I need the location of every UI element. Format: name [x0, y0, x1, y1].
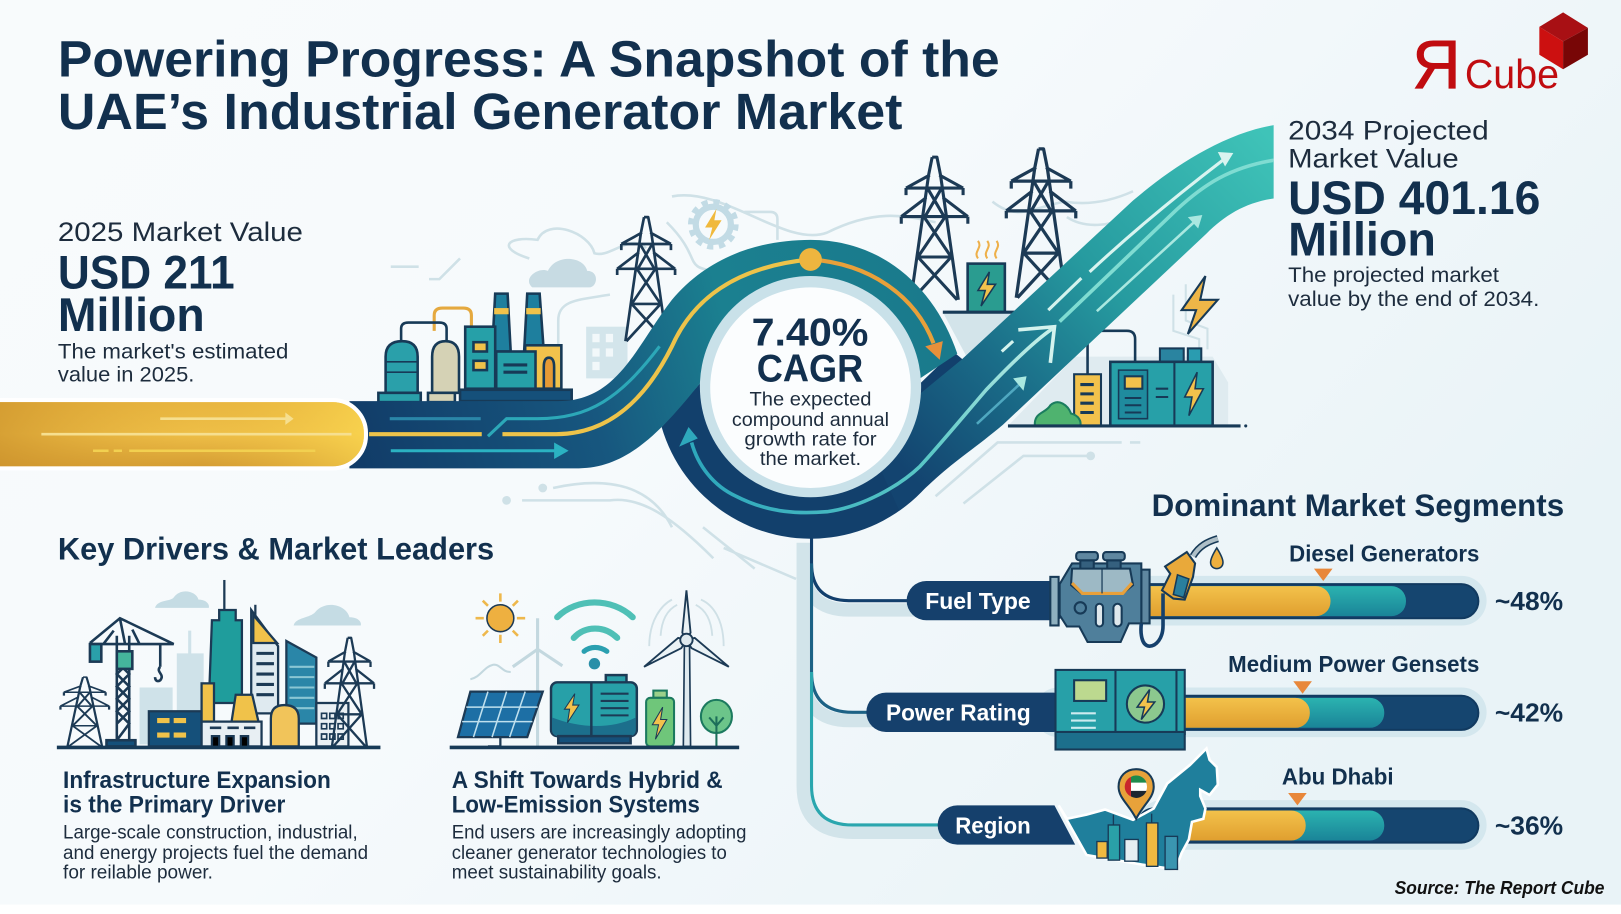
2034 projected value text: value by the end of 2034.	[1288, 286, 1539, 311]
title: Powering Progress: A Snapshot of the	[58, 31, 1000, 88]
growth flow: diagonal band	[879, 125, 1274, 511]
segment: region	[938, 748, 1563, 869]
cloud	[529, 259, 596, 287]
callout: medium power gensets: Medium Power Gensets	[1228, 651, 1479, 677]
icon: location pin with flag	[1119, 769, 1154, 819]
growth flow: S band	[349, 240, 957, 468]
segment: power rating	[866, 651, 1563, 750]
illustration: industrial plant	[378, 259, 628, 402]
CAGR disc: compound annual	[732, 409, 889, 431]
solar panel	[458, 692, 543, 746]
2034 projected value text: Market Value	[1288, 143, 1459, 173]
wifi	[557, 602, 633, 669]
growth flow: navy ring	[662, 351, 966, 539]
heading: key drivers: Key Drivers & Market Leaders	[58, 531, 494, 566]
pale towers	[140, 631, 204, 744]
chimneys	[492, 294, 544, 351]
callout: medium power gensets	[1228, 651, 1479, 694]
label pill	[866, 693, 1073, 732]
skyscrapers	[209, 580, 316, 724]
connector lines from CAGR ring to segments	[803, 532, 946, 832]
text: infrastructure driver: and energy projects fuel the demand	[63, 843, 368, 864]
text: hybrid shift: cleaner generator technologies to	[452, 843, 727, 864]
illustration: infrastructure city	[57, 580, 380, 747]
buildings	[460, 327, 572, 401]
2034 projected value text: USD 401.16	[1288, 172, 1540, 225]
battery	[646, 691, 674, 746]
bar	[1137, 800, 1487, 850]
text: hybrid shift: meet sustainability goals.	[452, 863, 662, 884]
value: ~48%	[1495, 588, 1563, 616]
gold input pipe	[0, 400, 366, 468]
title	[58, 31, 1000, 140]
logo: RCube	[1412, 12, 1588, 103]
CAGR disc: CAGR	[757, 346, 863, 390]
2025 market value text: Million	[58, 289, 205, 342]
city towers	[60, 677, 109, 747]
text: infrastructure driver	[63, 767, 368, 884]
2034 projected value text: Million	[1288, 213, 1436, 266]
illustration: hybrid systems	[450, 590, 739, 747]
callout: abu dhabi: Abu Dhabi	[1282, 764, 1394, 790]
label pill	[938, 805, 1075, 845]
label pill: Fuel Type	[925, 588, 1031, 614]
pale turbine	[470, 618, 562, 747]
decorative circuit lines	[391, 191, 1207, 579]
2034 projected value text: 2034 Projected	[1288, 116, 1489, 146]
icon: lightning bolt	[1182, 276, 1218, 334]
callout: diesel generators	[1289, 540, 1479, 581]
bar	[1034, 687, 1487, 737]
clouds	[155, 591, 361, 625]
segment: fuel type	[907, 539, 1563, 646]
text: hybrid shift: End users are increasingly adopting	[452, 822, 746, 843]
2025 market value text: USD 211	[58, 246, 235, 299]
CAGR disc: The expected	[750, 388, 871, 410]
text: hybrid shift	[452, 767, 746, 884]
ring arrow	[679, 329, 1052, 513]
tree	[701, 700, 732, 746]
CAGR disc: the market.	[760, 448, 861, 470]
CAGR disc: 7.40%	[752, 310, 868, 354]
2025 market value text	[58, 217, 303, 386]
2034 projected value text: The projected market	[1288, 262, 1499, 287]
value: ~36%	[1495, 812, 1563, 840]
text: hybrid shift: Low-Emission Systems	[452, 792, 700, 819]
callout: abu dhabi	[1282, 764, 1394, 805]
text: infrastructure driver: is the Primary Driver	[63, 792, 285, 819]
sun	[476, 593, 525, 643]
2025 market value text: value in 2025.	[58, 361, 194, 386]
value: ~42%	[1495, 700, 1563, 728]
icon: gear with bolt	[691, 202, 736, 247]
2025 market value text: 2025 Market Value	[58, 217, 303, 247]
text: infrastructure driver: Large-scale construction, industrial,	[63, 822, 358, 843]
generator	[551, 675, 637, 743]
heading: dominant segments: Dominant Market Segments	[1152, 488, 1564, 523]
callout: diesel generators: Diesel Generators	[1289, 540, 1479, 566]
ground	[450, 746, 739, 749]
big turbine	[644, 590, 729, 746]
bar	[1085, 576, 1487, 625]
tanks	[378, 323, 459, 402]
label pill	[907, 581, 1072, 620]
logo: RCube: Cube	[1465, 52, 1559, 97]
title: UAE’s Industrial Generator Market	[58, 83, 903, 140]
illustration: battery box	[943, 241, 1018, 357]
label pill: Region	[955, 812, 1031, 838]
icon: genset	[1056, 670, 1185, 750]
text: infrastructure driver: for reilable power.	[63, 863, 213, 884]
text: hybrid shift: A Shift Towards Hybrid &	[452, 767, 723, 794]
logo: RCube: Я	[1412, 27, 1461, 103]
low buildings	[149, 683, 348, 746]
flow lines on S band	[369, 248, 943, 459]
icon: UAE map	[1059, 748, 1218, 869]
icon: engine and nozzle	[1050, 539, 1223, 646]
CAGR disc	[700, 276, 921, 497]
2025 market value text: The market's estimated	[58, 339, 288, 364]
text: infrastructure driver: Infrastructure Expansion	[63, 767, 331, 794]
gold pipe	[434, 308, 471, 331]
label pill: Power Rating	[886, 700, 1031, 726]
diagonal arrows	[977, 152, 1274, 424]
illustration: generator unit	[1008, 331, 1247, 427]
ground	[57, 746, 380, 749]
towers	[617, 149, 1076, 341]
source note: Source: The Report Cube	[1395, 878, 1604, 898]
CAGR disc: growth rate for	[744, 429, 877, 451]
2034 projected value text	[1288, 116, 1540, 311]
crane	[90, 618, 174, 746]
pale city block	[586, 327, 628, 378]
